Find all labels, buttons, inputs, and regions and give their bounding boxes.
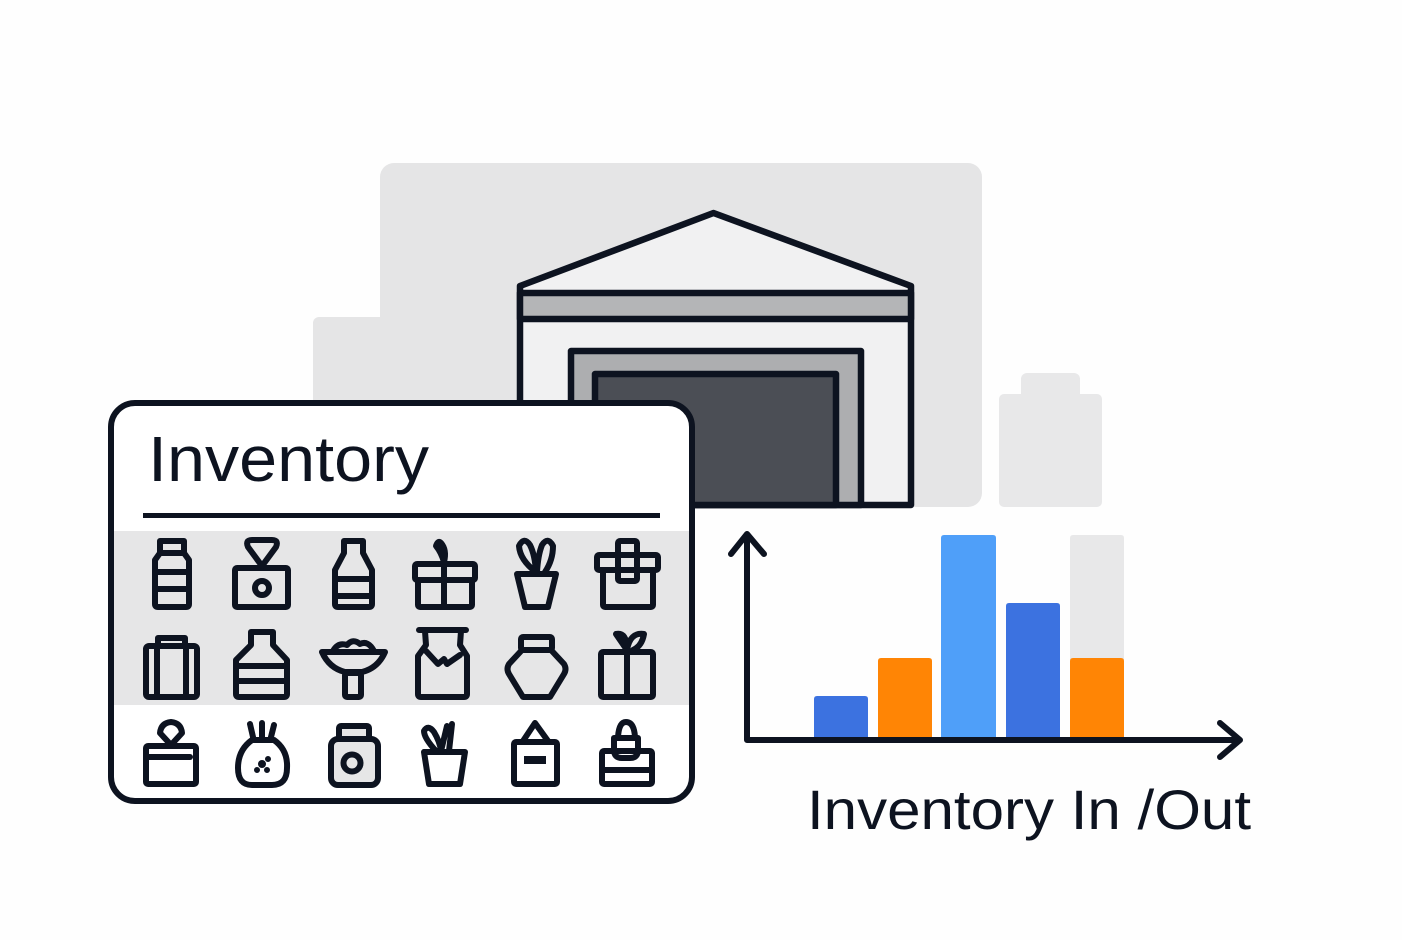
chart axes with arrows — [731, 534, 1240, 757]
warehouse — [520, 213, 911, 505]
icon: tag box — [146, 722, 196, 784]
icon: bag on tray — [602, 722, 652, 784]
chart label: Inventory In /Out — [807, 778, 1251, 841]
icon: vase — [508, 637, 566, 697]
icon: camera box — [235, 540, 288, 607]
background silhouette: large building — [313, 163, 982, 507]
icon: round jar — [331, 726, 378, 785]
icon: glass jar — [418, 630, 467, 697]
icon: labelled box — [514, 723, 557, 784]
heading rule — [143, 513, 660, 518]
icon: cup of tools — [424, 724, 465, 784]
icon: gift box — [415, 542, 475, 607]
icon: box with cross — [597, 541, 658, 607]
icon: bowl — [322, 641, 385, 697]
icon: potted plant — [517, 541, 556, 607]
bar chart — [731, 534, 1251, 841]
shelf band — [114, 531, 689, 705]
icon: jar with stripes — [155, 541, 189, 607]
bars — [814, 535, 1124, 737]
icon: bottle — [335, 541, 372, 607]
inventory panel — [111, 403, 692, 801]
icon: wide bottle — [236, 632, 287, 697]
icon: gift with bow — [601, 634, 653, 697]
panel heading: Inventory — [148, 423, 429, 495]
background silhouette: bottle — [999, 373, 1102, 507]
icon: suitcase — [146, 638, 197, 697]
icon: pouch — [238, 723, 287, 785]
icon grid — [146, 540, 658, 785]
